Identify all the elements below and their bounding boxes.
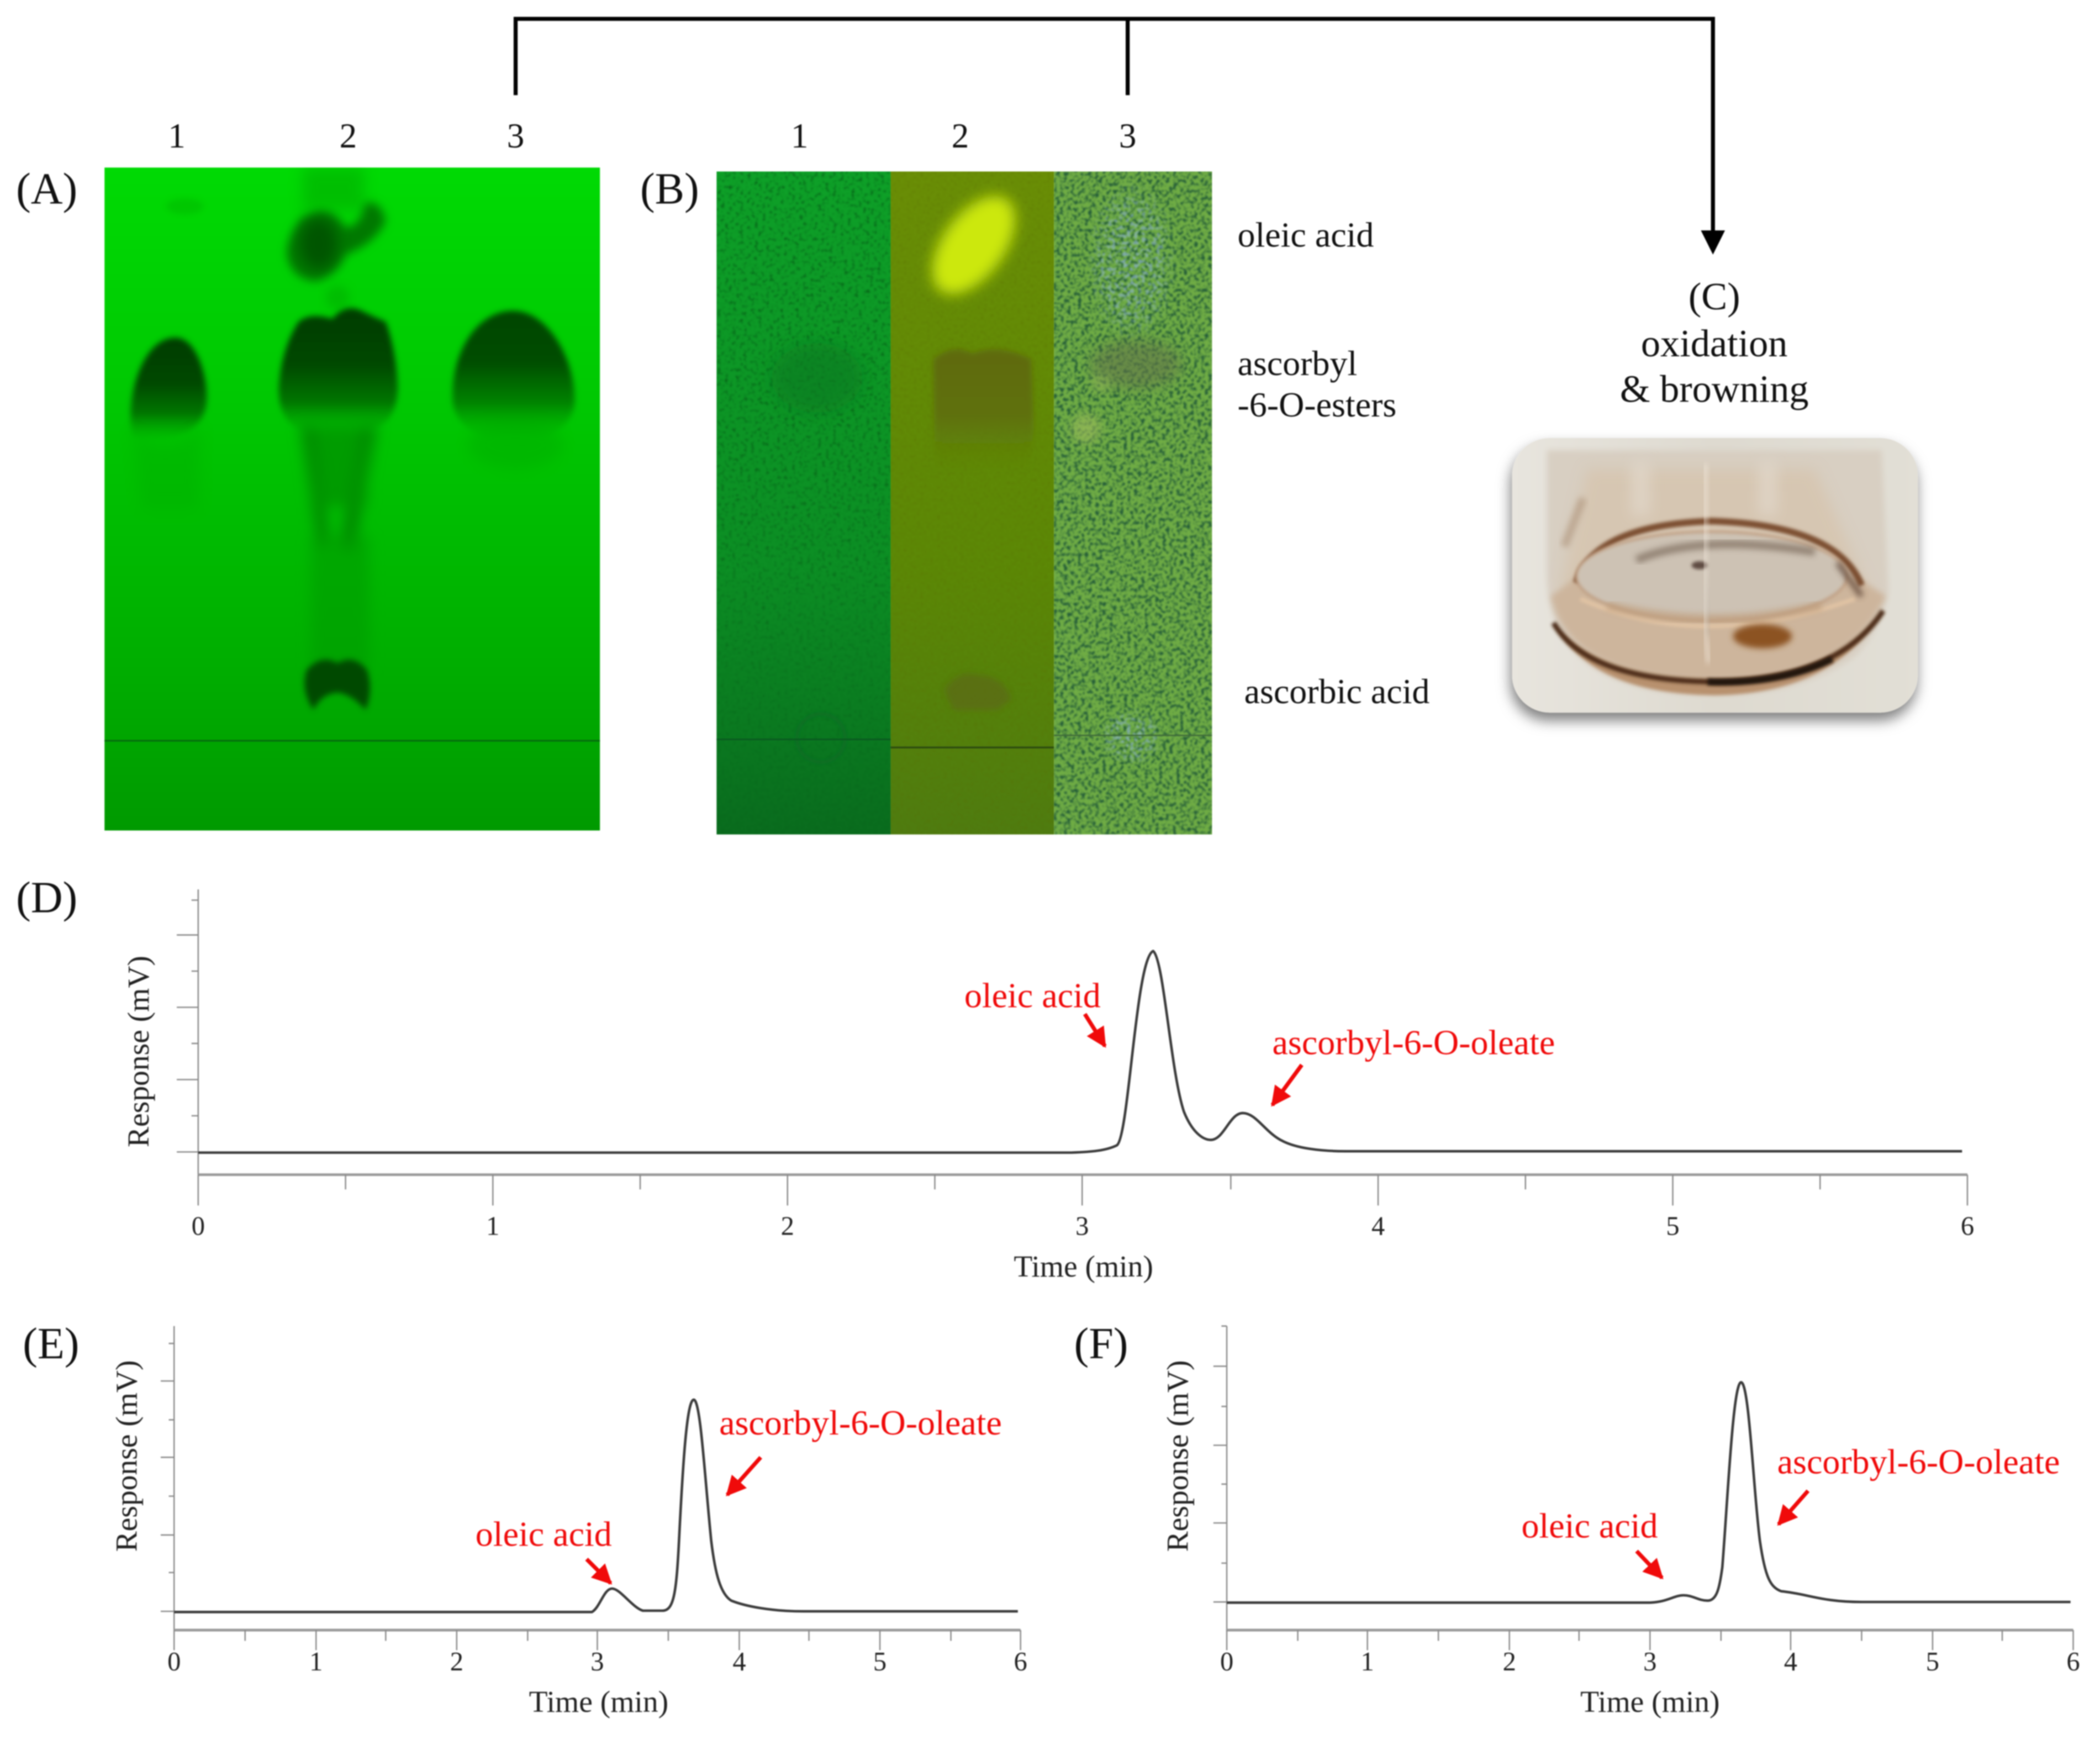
heading: D: (D)	[16, 873, 77, 922]
x axis: 1	[486, 1212, 499, 1241]
heading: A: (A)	[16, 165, 77, 214]
annotation: ascorbyl-6-O-oleate	[719, 1403, 1002, 1495]
heading: C oxidation and browning: (C)	[1689, 275, 1740, 318]
chart F: HPLC chromatogram	[1162, 1326, 2080, 1719]
connector arrow from lanes 3 to panel C	[516, 19, 1725, 255]
TLC spot label: ascorbyl-6-O-esters: -6-O-esters	[1237, 385, 1396, 424]
photo: browned glass dish	[1512, 438, 1918, 713]
y axis: Response (mV)	[122, 956, 156, 1147]
vertical reflection	[1705, 463, 1709, 663]
lane numbers for panel A: 3	[507, 117, 524, 155]
x axis	[192, 1175, 1974, 1284]
chart D: HPLC chromatogram	[122, 889, 1974, 1284]
annotation: oleic acid	[476, 1514, 612, 1583]
right drip	[1838, 563, 1861, 596]
x axis: 6	[2066, 1647, 2080, 1676]
annotation: oleic acid: oleic acid	[1522, 1506, 1658, 1546]
x axis	[167, 1630, 1027, 1719]
heading: E: (E)	[23, 1320, 79, 1368]
lower lip	[1556, 611, 1882, 695]
panel B: stained TLC composite	[716, 171, 1212, 835]
x axis: 5	[1666, 1212, 1680, 1241]
x axis: 2	[1503, 1647, 1516, 1676]
lane numbers for panel B: 2	[952, 117, 969, 155]
annotation: ascorbyl-6-O-oleate: ascorbyl-6-O-oleate	[1273, 1022, 1555, 1062]
TLC spot label: ascorbic acid: ascorbic acid	[1244, 672, 1429, 711]
annotation: ascorbyl-6-O-oleate: ascorbyl-6-O-oleate	[719, 1403, 1002, 1442]
brown spot	[1733, 624, 1792, 648]
x axis: 3	[1075, 1212, 1089, 1241]
x axis: 2	[781, 1212, 794, 1241]
white top and bottom glow	[1533, 446, 1869, 449]
x axis: 1	[1361, 1647, 1374, 1676]
heading: F: (F)	[1074, 1320, 1128, 1368]
x axis: 3	[590, 1647, 604, 1676]
x axis	[1220, 1630, 2080, 1719]
panel A: TLC plate under UV	[104, 167, 600, 830]
grey residue band	[1637, 544, 1815, 560]
heading: B: (B)	[640, 165, 699, 214]
x axis: Time (min)	[1580, 1685, 1720, 1719]
x axis: 5	[873, 1647, 887, 1676]
trace	[174, 1400, 1018, 1612]
x axis: 6	[1961, 1212, 1974, 1241]
trace	[1227, 1382, 2071, 1602]
y axis	[1162, 1326, 1227, 1631]
x axis: 3	[1643, 1647, 1656, 1676]
heading: C oxidation and browning: & browning	[1620, 368, 1809, 411]
TLC spot label: ascorbyl-6-O-esters: ascorbyl	[1237, 344, 1357, 383]
annotation: oleic acid	[964, 976, 1105, 1046]
lane 2	[890, 171, 1054, 835]
lane numbers for panel A: 1	[168, 117, 186, 155]
y axis	[110, 1326, 174, 1631]
origin line	[104, 740, 600, 741]
annotation: ascorbyl-6-O-oleate	[1777, 1442, 2060, 1524]
heading: C oxidation and browning	[1620, 275, 1809, 411]
x axis: Time (min)	[529, 1685, 668, 1719]
y axis	[122, 889, 198, 1175]
lane 2 ascorbic acid spot	[304, 660, 370, 710]
x axis: 4	[1371, 1212, 1385, 1241]
lane numbers for panel B	[791, 117, 1136, 155]
lane numbers for panel B: 3	[1119, 117, 1136, 155]
faint spot lane 1	[166, 198, 204, 214]
x axis: 0	[167, 1647, 181, 1676]
inner floor and rim band	[1576, 521, 1861, 586]
lane 2 tail streak	[300, 426, 378, 670]
annotation: oleic acid	[1522, 1506, 1662, 1578]
x axis: 0	[1220, 1647, 1233, 1676]
annotation: oleic acid: oleic acid	[964, 976, 1101, 1015]
x axis: 2	[450, 1647, 463, 1676]
annotation: ascorbyl-6-O-oleate	[1273, 1022, 1555, 1105]
dark lower rim	[1554, 611, 1883, 682]
x axis: Time (min)	[1014, 1250, 1153, 1284]
chart E: HPLC chromatogram	[110, 1326, 1027, 1719]
x axis: 1	[309, 1647, 323, 1676]
lane numbers for panel A	[168, 117, 524, 155]
heading: C oxidation and browning: oxidation	[1641, 322, 1787, 365]
x axis: 4	[732, 1647, 746, 1676]
lane 2 ester spot	[278, 308, 398, 434]
lower bowl	[1551, 576, 1886, 681]
annotation: ascorbyl-6-O-oleate: ascorbyl-6-O-oleate	[1777, 1442, 2060, 1481]
TLC spot label: oleic acid: oleic acid	[1237, 215, 1374, 254]
lane 3	[1054, 171, 1212, 835]
annotation: oleic acid: oleic acid	[476, 1514, 612, 1553]
x axis: 6	[1014, 1647, 1027, 1676]
glass wall	[1547, 450, 1888, 695]
TLC spot label: ascorbyl-6-O-esters	[1237, 344, 1396, 424]
y axis: Response (mV)	[110, 1360, 144, 1552]
y axis: Response (mV)	[1162, 1360, 1195, 1552]
lane 1	[716, 171, 890, 835]
lane numbers for panel A: 2	[340, 117, 357, 155]
lane 1 ester spot	[130, 338, 207, 439]
x axis: 5	[1926, 1647, 1939, 1676]
x axis: 4	[1784, 1647, 1797, 1676]
lane numbers for panel B: 1	[791, 117, 808, 155]
lane 2 upper smear	[287, 167, 386, 309]
lane 3 ester spot	[452, 311, 574, 442]
trace	[198, 951, 1962, 1153]
x axis: 0	[192, 1212, 205, 1241]
